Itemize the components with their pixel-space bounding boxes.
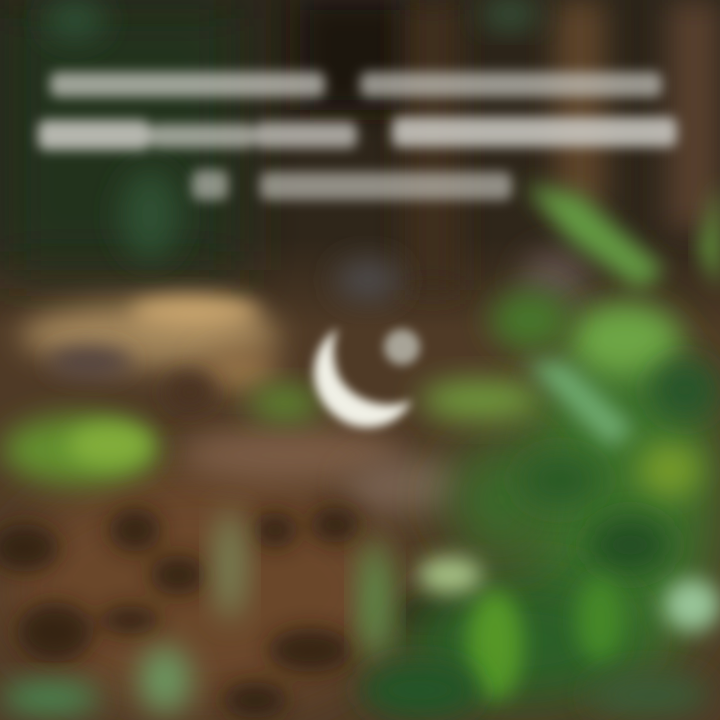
ground: tan leaf litter patch — [20, 296, 280, 410]
foliage: green patch at left — [0, 387, 321, 714]
background: dark forest canopy and trunks — [0, 0, 720, 310]
foliage: large green plant at right — [360, 180, 720, 718]
heading: blurred title text lines — [38, 72, 677, 200]
ground: brown soil with dark clumps — [0, 427, 465, 718]
icon: white crescent logo — [314, 328, 420, 427]
